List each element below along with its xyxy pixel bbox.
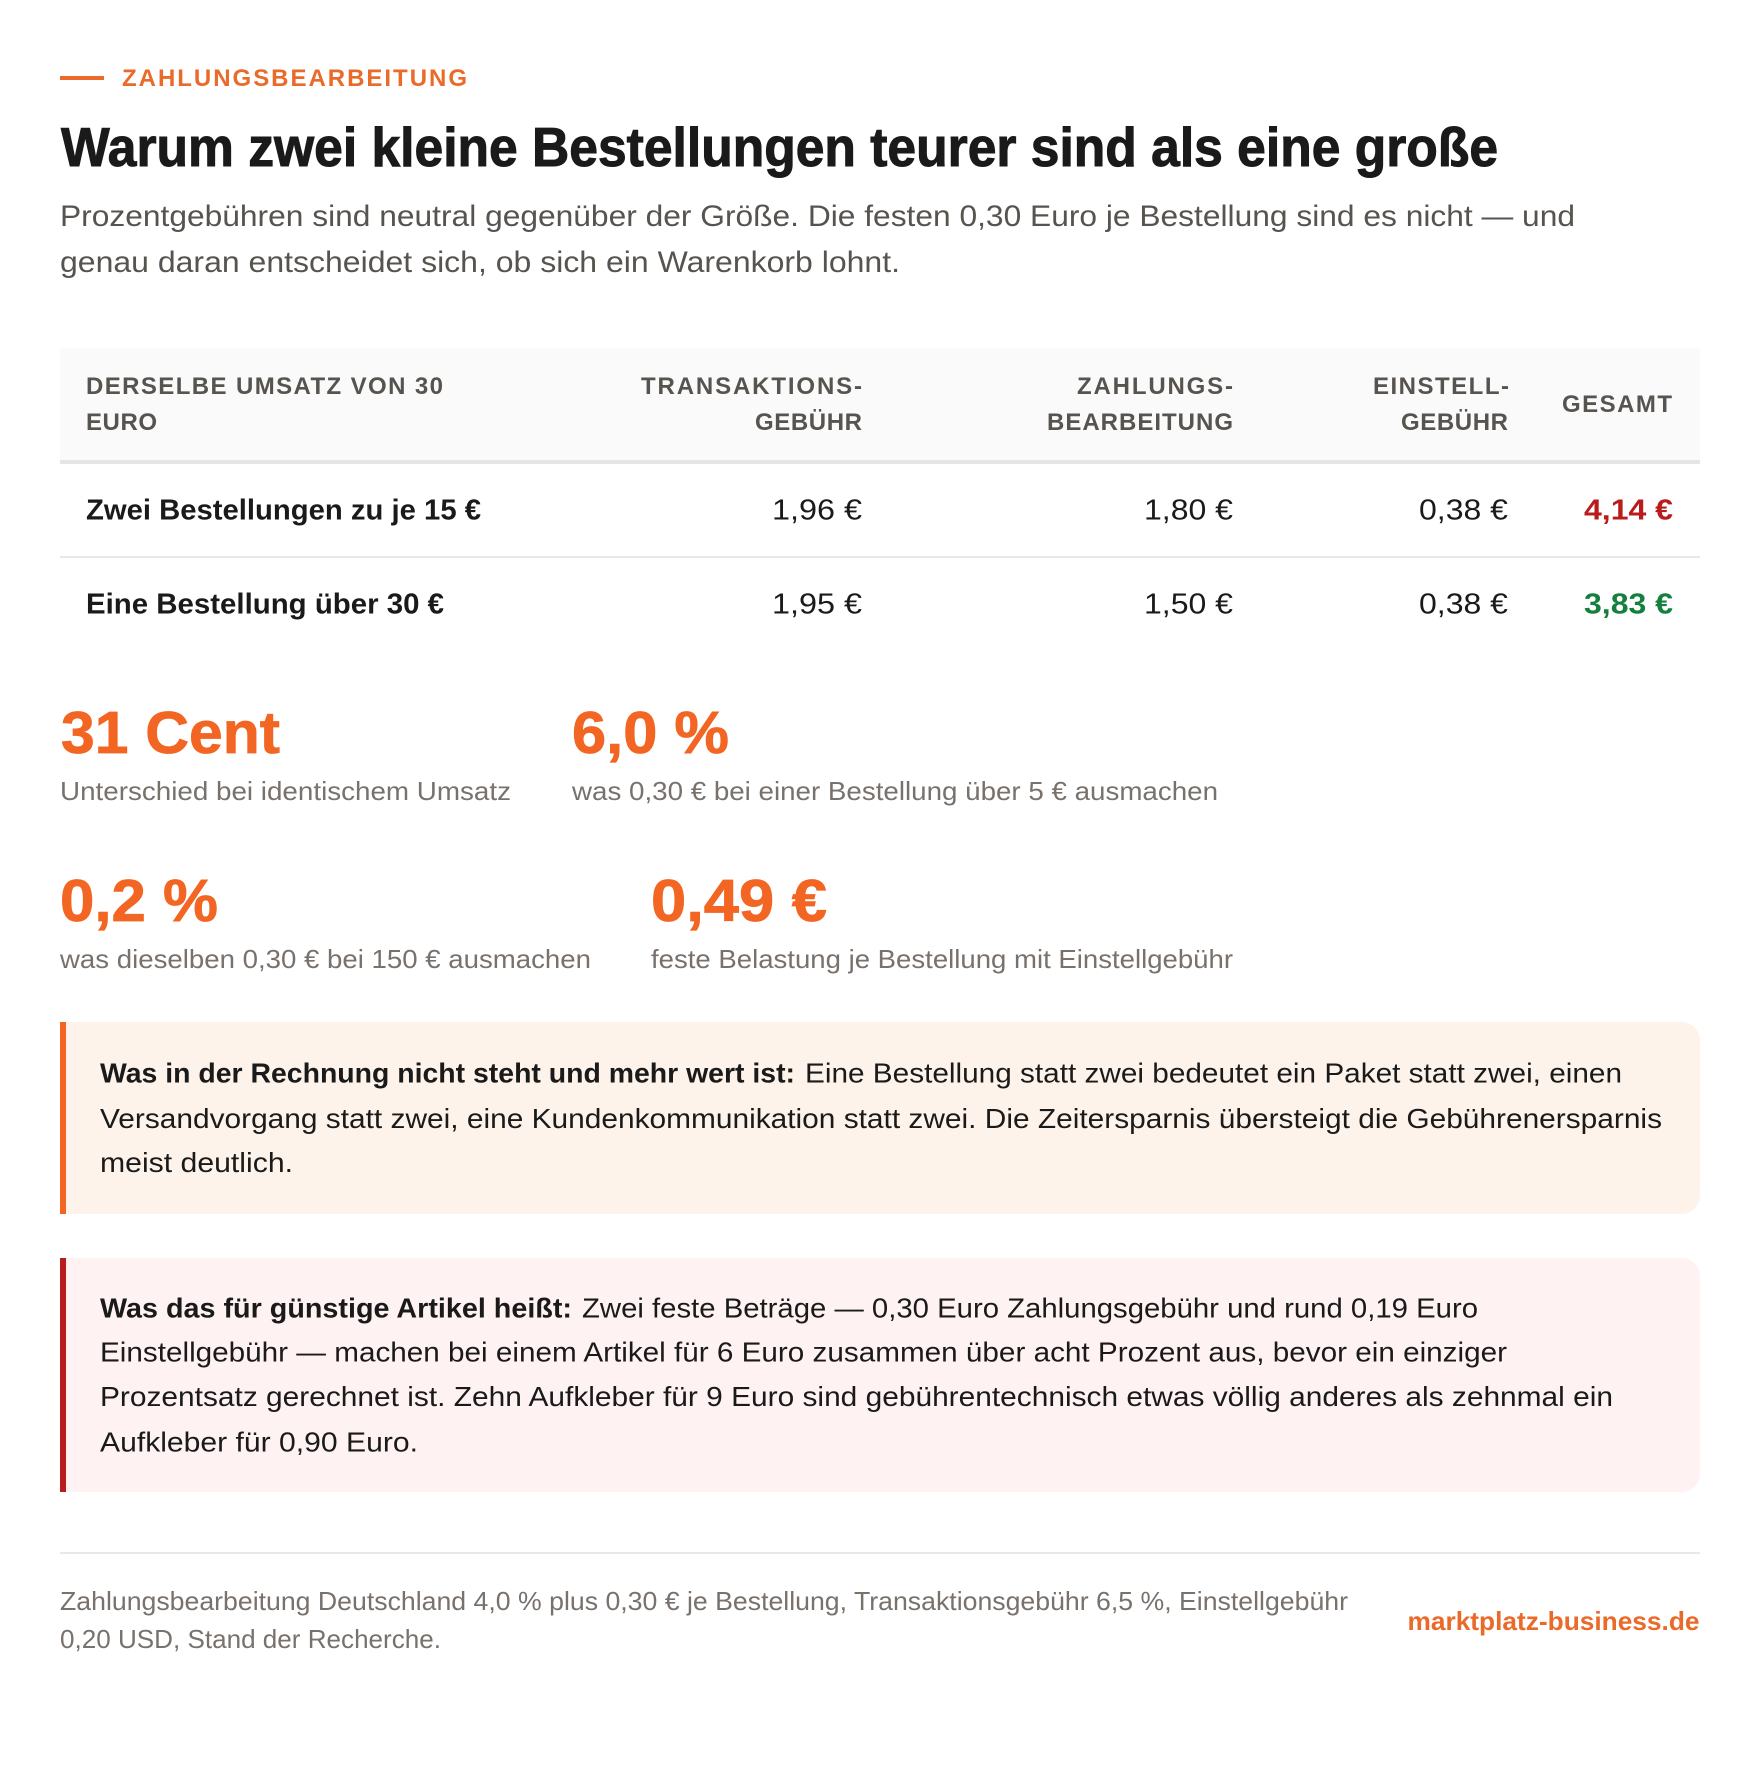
stat: 0,49 €: 0,49 € [651,868,827,934]
callout: what the invoice does not show [60,1022,1700,1214]
stat: 31 Cent [60,700,511,806]
eyebrow: ZAHLUNGSBEARBEITUNG [122,65,467,92]
callout: what the invoice does not show: Versandvorgang statt zwei, eine Kundenkommunikation statt zwei. Die Zeitersparnis übersteigt die Gebührenersparnis [100,1103,1662,1134]
callout: cheap items [60,1258,1700,1492]
stat: 6,0 %: 6,0 % [572,700,729,766]
callout: cheap items: Prozentsatz gerechnet ist. Zehn Aufkleber für 9 Euro sind gebührentechnisch etwas völlig anderes als zehnmal ein [100,1381,1613,1412]
table header row: ZAHLUNGS- [1077,373,1233,400]
stat: 6,0 % [571,700,1218,806]
table header row: GEBÜHR [755,409,862,436]
subtitle: genau daran entscheidet sich, ob sich ein Warenkorb lohnt. [60,246,900,279]
stat: 0,2 %: 0,2 % [60,868,218,934]
row: one order [86,589,1673,621]
callout: what the invoice does not show: Eine Bestellung statt zwei bedeutet ein Paket statt zwei, einen [805,1058,1622,1088]
row: one order: 1,50 € [1144,589,1233,621]
footer source note: 0,20 USD, Stand der Recherche. [60,1624,441,1654]
title: Warum zwei kleine Bestellungen teurer sind als eine große [61,116,1498,178]
table header row: EURO [86,409,157,436]
footer brand: marktplatz-business.de [1408,1606,1700,1636]
callout: what the invoice does not show: Was in der Rechnung nicht steht und mehr wert ist: [100,1058,795,1088]
stat: 31 Cent: 31 Cent [61,700,280,766]
stat: 31 Cent: Unterschied bei identischem Umsatz [60,776,511,806]
row: two orders: 4,14 € [1584,495,1673,527]
stat: 0,2 %: was dieselben 0,30 € bei 150 € ausmachen [59,944,591,974]
row: one order: Eine Bestellung über 30 € [86,589,444,621]
table header row: GESAMT [1562,391,1672,418]
table header row [60,348,1700,464]
callout: what the invoice does not show: meist deutlich. [100,1147,293,1178]
table header row: GEBÜHR [1401,409,1508,436]
comparison table [60,348,1700,621]
callout: cheap items: Was das für günstige Artikel heißt: [100,1292,572,1324]
subtitle: Prozentgebühren sind neutral gegenüber der Größe. Die festen 0,30 Euro je Bestellung sind es nicht — und [60,200,1575,233]
row: one order: 3,83 € [1584,589,1673,621]
table header row: EINSTELL- [1373,373,1509,400]
row: two orders: Zwei Bestellungen zu je 15 € [86,495,481,527]
row: two orders [86,495,1673,527]
callout: cheap items: Aufkleber für 0,90 Euro. [100,1426,418,1458]
footer source note: Zahlungsbearbeitung Deutschland 4,0 % plus 0,30 € je Bestellung, Transaktionsgebühr 6,5 %, Einstellgebühr [60,1586,1348,1616]
row: one order: 1,95 € [772,589,862,621]
row: two orders: 1,80 € [1144,495,1233,527]
stat: 0,49 €: feste Belastung je Bestellung mit Einstellgebühr [651,944,1233,974]
stat: 0,2 % [59,868,591,974]
table header row: DERSELBE UMSATZ VON 30 [86,373,443,400]
header block [60,65,1575,279]
row: two orders: 0,38 € [1419,495,1508,527]
table header row: BEARBEITUNG [1047,409,1233,436]
footer source note [60,1586,1348,1654]
stat: 6,0 %: was 0,30 € bei einer Bestellung über 5 € ausmachen [571,776,1218,806]
callout: cheap items: Zwei feste Beträge — 0,30 Euro Zahlungsgebühr und rund 0,19 Euro [582,1292,1478,1324]
stat: 0,49 € [651,868,1233,974]
row: one order: 0,38 € [1419,589,1508,621]
callout: cheap items: Einstellgebühr — machen bei einem Artikel für 6 Euro zusammen über acht Prozent aus, bevor ein einziger [100,1336,1507,1368]
subtitle [60,200,1575,279]
table header row: TRANSAKTIONS- [641,373,862,400]
row: two orders: 1,96 € [772,495,862,527]
